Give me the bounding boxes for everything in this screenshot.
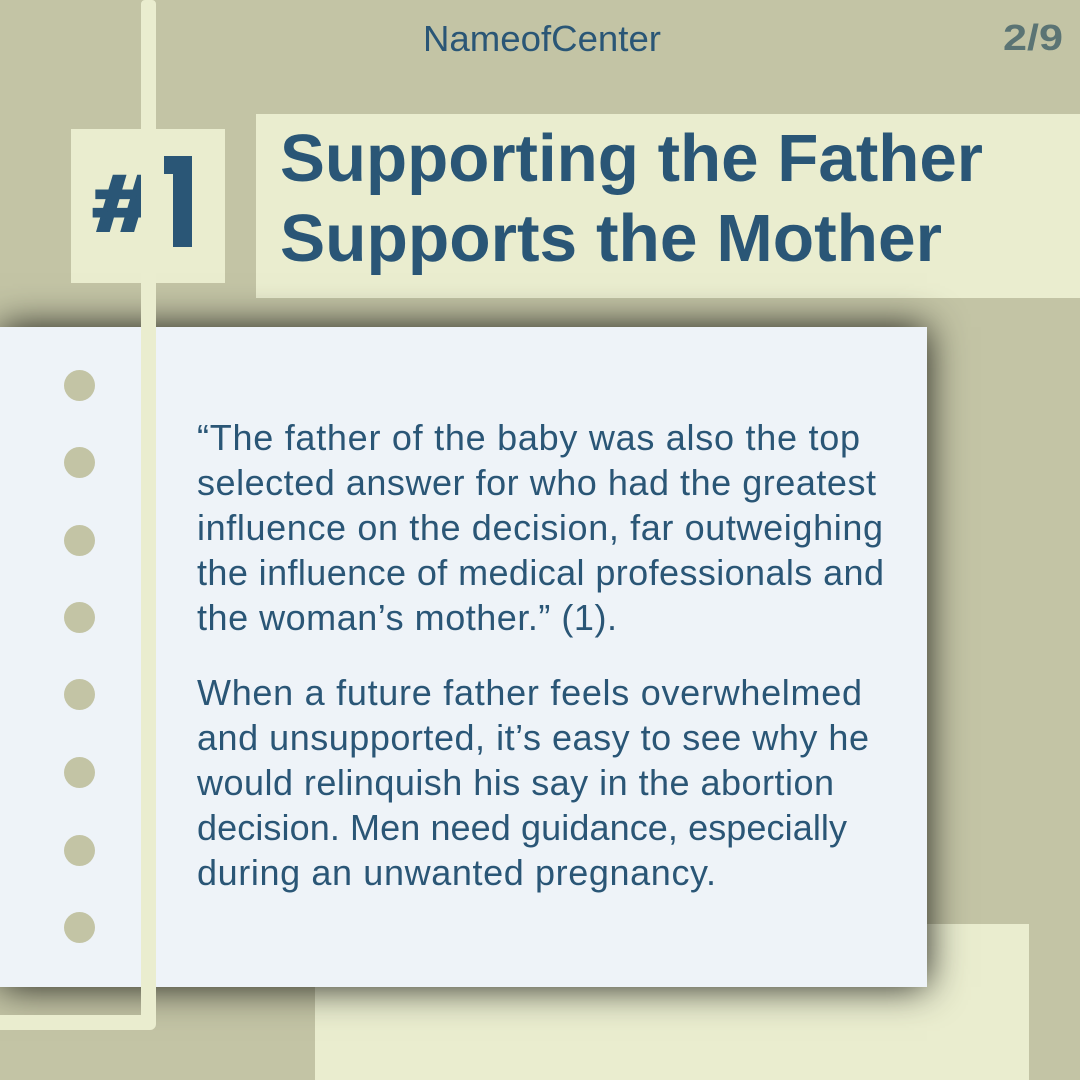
binding line (0, 0, 156, 1030)
quote text: selected answer for who had the greatest (197, 462, 876, 503)
panel: title background (256, 114, 1080, 298)
title (280, 121, 983, 276)
commentary text: during an unwanted pregnancy. (197, 852, 716, 893)
badge number (92, 156, 192, 247)
notebook holes (64, 370, 95, 943)
commentary text: When a future father feels overwhelmed (197, 672, 862, 713)
quote text: “The father of the baby was also the top (197, 417, 860, 458)
badge number: 1 (140, 132, 211, 274)
quote text: the influence of medical professionals and (197, 552, 884, 593)
quote text: the woman’s mother.” (1). (197, 597, 617, 638)
title: Supporting the Father (280, 121, 983, 196)
decorative block: bottom rectangle (315, 924, 1029, 1080)
panel: quote card (0, 327, 927, 987)
header: center name: NameofCenter (423, 18, 661, 59)
title: Supports the Mother (280, 201, 942, 276)
commentary text (196, 672, 869, 893)
quote text (197, 417, 884, 638)
commentary text: decision. Men need guidance, especially (197, 807, 847, 848)
commentary text: and unsupported, it’s easy to see why he (197, 717, 869, 758)
quote text: influence on the decision, far outweighing (197, 507, 883, 548)
commentary text: would relinquish his say in the abortion (196, 762, 834, 803)
page number: 2/9 (1003, 17, 1063, 58)
panel: number badge (71, 129, 225, 283)
badge number: # (92, 159, 153, 247)
